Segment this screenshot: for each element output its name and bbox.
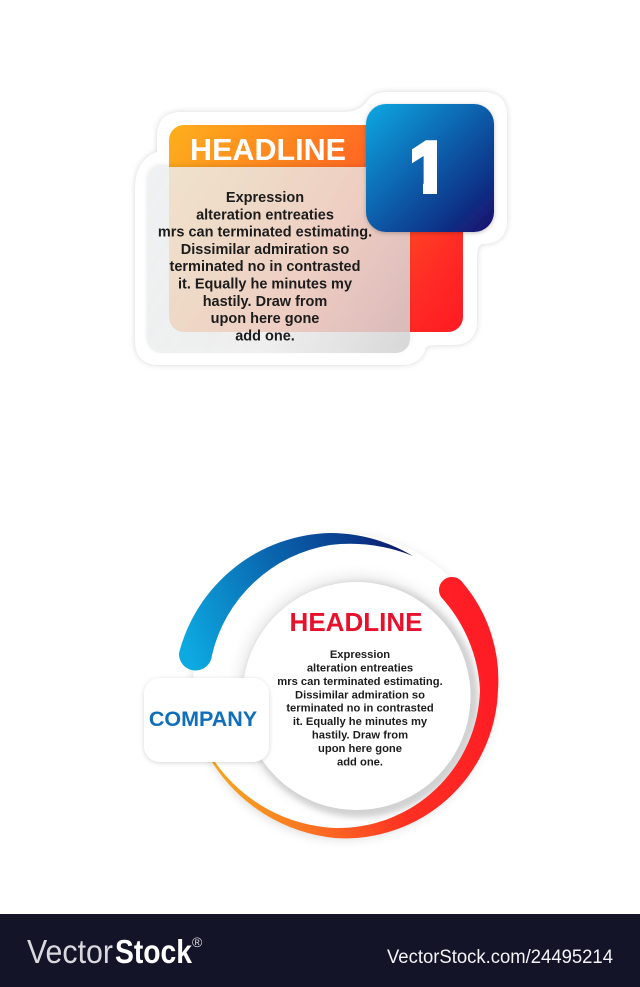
number badge: 1	[409, 127, 450, 210]
body text: Dissimilar admiration so	[181, 242, 349, 258]
circle heading: HEADLINE	[290, 607, 422, 637]
inner white circle	[242, 582, 470, 810]
number badge	[366, 104, 494, 232]
body text	[158, 190, 372, 344]
circle body text	[277, 649, 443, 768]
body text: terminated no in contrasted	[170, 259, 360, 275]
circle body text: it. Equally he minutes my	[293, 716, 428, 728]
white disc	[193, 534, 495, 836]
logo	[27, 933, 203, 970]
circle body text: add one.	[337, 756, 383, 768]
logo: Stock	[115, 933, 193, 970]
panel: circular headline	[144, 533, 498, 838]
company label	[144, 678, 269, 762]
image id: VectorStock.com/24495214	[387, 946, 613, 968]
circle body text: Dissimilar admiration so	[295, 689, 425, 701]
circle body text: Expression	[330, 649, 390, 661]
soft halo around inner circle	[236, 574, 476, 814]
body text: hastily. Draw from	[203, 294, 327, 310]
circle body text: hastily. Draw from	[312, 730, 408, 742]
body text: upon here gone	[211, 311, 319, 327]
panel: headline card 1	[135, 92, 507, 365]
footer bar	[0, 914, 640, 987]
red to orange tapered arc	[212, 577, 498, 838]
logo: ®	[192, 934, 203, 950]
body text: add one.	[235, 328, 295, 344]
orange to red card	[169, 125, 463, 332]
blue tapered arc	[179, 533, 413, 671]
inner shadow crescent	[242, 581, 478, 817]
body text: alteration entreaties	[196, 207, 334, 223]
card heading: HEADLINE	[190, 133, 346, 167]
translucent grey panel	[147, 167, 410, 353]
logo: Vector	[27, 933, 113, 970]
body text: mrs can terminated estimating.	[158, 225, 372, 241]
body text: it. Equally he minutes my	[178, 276, 352, 292]
circle body text: alteration entreaties	[307, 662, 413, 674]
circle body text: terminated no in contrasted	[286, 703, 434, 715]
circle body text: mrs can terminated estimating.	[277, 676, 443, 688]
circle body text: upon here gone	[318, 743, 402, 755]
sticker outline	[135, 92, 507, 365]
company label: COMPANY	[149, 707, 257, 731]
body text: Expression	[226, 190, 304, 206]
